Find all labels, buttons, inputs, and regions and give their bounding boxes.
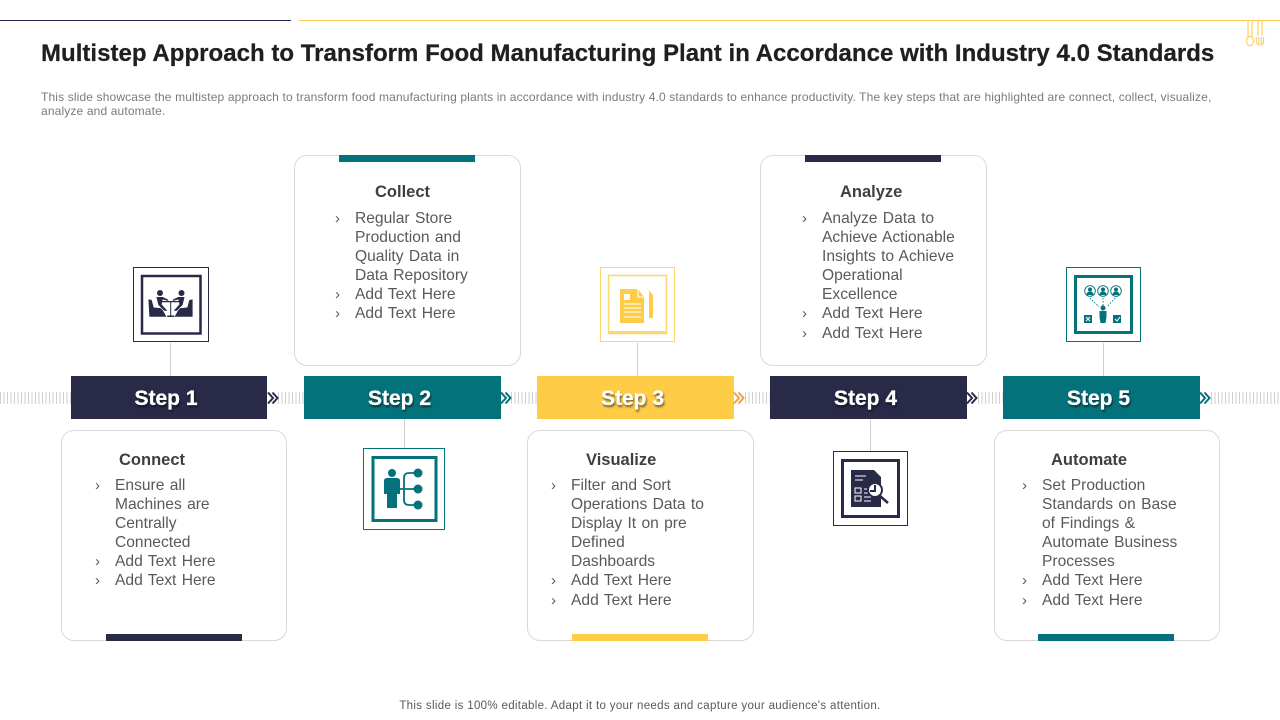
step 5 banner: Step 5 xyxy=(1067,387,1130,410)
arrow after step 5 xyxy=(1200,392,1211,404)
connect list: Ensure all Machines are Centrally Connected Add Text Here Add Text Here xyxy=(115,477,216,589)
panel: automate xyxy=(994,430,1220,641)
icon: spoon and fork xyxy=(1246,20,1264,46)
visualize heading: Visualize xyxy=(586,451,656,469)
automate list: Set Production Standards on Base of Findings & Automate Business Processes Add Text Here Add Text Here xyxy=(1042,477,1177,609)
panel: automate: › xyxy=(1022,572,1027,589)
panel: connect: › xyxy=(95,477,100,494)
visualize accent bar xyxy=(572,634,708,641)
panel: collect: › xyxy=(335,210,340,227)
panel: connect xyxy=(61,430,287,641)
collect list: Regular Store Production and Quality Data in Data Repository Add Text Here Add Text Here xyxy=(355,210,468,322)
automate heading: Automate xyxy=(1051,451,1127,469)
stripe band 2-3 xyxy=(511,392,537,404)
subtitle description: This slide showcase the multistep approach to transform food manufacturing plants in accordance with industry 4.0 standards to enhance productivity. The key steps that are highlighted are connect, collect, visualize, xyxy=(41,90,1211,104)
step 1 banner: Step 1 xyxy=(134,387,198,410)
panel: analyze: › xyxy=(802,325,807,342)
icon: documents xyxy=(600,267,675,342)
panel: analyze xyxy=(760,155,987,366)
top rule: dark segment xyxy=(0,20,291,21)
step 3 banner: Step 3 xyxy=(601,387,664,410)
connect heading: Connect xyxy=(119,451,185,469)
step 2 banner: Step 2 xyxy=(368,387,431,410)
icon: decision maker xyxy=(1066,267,1141,342)
collect accent bar xyxy=(339,155,475,162)
step 4 banner: Step 4 xyxy=(834,387,897,410)
icon: people meeting at table xyxy=(133,267,209,342)
analyze list: Analyze Data to Achieve Actionable Insights to Achieve Operational Excellence Add Text Here Add Text Here xyxy=(822,210,955,342)
connector step 3 xyxy=(637,343,638,376)
analyze accent bar xyxy=(805,155,941,162)
step 1 banner xyxy=(71,376,267,419)
stripe band left xyxy=(0,392,71,404)
arrow after step 4 xyxy=(967,392,978,404)
panel: automate: › xyxy=(1022,592,1027,609)
stripe band right xyxy=(1211,392,1280,404)
panel: analyze: › xyxy=(802,210,807,227)
stripe band 3-4 xyxy=(745,392,770,404)
panel: collect xyxy=(294,155,521,366)
step 3 banner xyxy=(537,376,734,419)
title: Multistep Approach to Transform Food Manufacturing Plant in Accordance with Industry 4.0 Standards xyxy=(41,40,1214,67)
analyze heading: Analyze xyxy=(840,183,902,201)
panel: connect: › xyxy=(95,553,100,570)
connect accent bar xyxy=(106,634,242,641)
connector step 4 xyxy=(870,419,871,451)
step 4 banner xyxy=(770,376,967,419)
panel: analyze: › xyxy=(802,305,807,322)
step 5 banner xyxy=(1003,376,1200,419)
subtitle description xyxy=(41,90,1211,118)
connector step 2 xyxy=(404,419,405,448)
visualize list: Filter and Sort Operations Data to Display It on pre Defined Dashboards Add Text Here Add Text Here xyxy=(571,477,704,609)
panel: automate: › xyxy=(1022,477,1027,494)
connector step 5 xyxy=(1103,343,1104,376)
panel: collect: › xyxy=(335,305,340,322)
connector step 1 xyxy=(170,343,171,376)
automate accent bar xyxy=(1038,634,1174,641)
panel: visualize: › xyxy=(551,592,556,609)
arrow after step 1 xyxy=(267,392,279,404)
subtitle description: analyze and automate. xyxy=(41,104,165,118)
top rule: yellow segment xyxy=(299,20,1280,21)
panel: visualize: › xyxy=(551,572,556,589)
step 2 banner xyxy=(304,376,501,419)
arrow after step 3 xyxy=(733,392,745,404)
stripe band 1-2 xyxy=(278,392,304,404)
icon: person with network xyxy=(363,448,445,530)
collect heading: Collect xyxy=(375,183,430,201)
icon: report with magnifier xyxy=(833,451,908,526)
panel: visualize xyxy=(527,430,754,641)
stripe band 4-5 xyxy=(978,392,1003,404)
panel: connect: › xyxy=(95,572,100,589)
panel: visualize: › xyxy=(551,477,556,494)
arrow after step 2 xyxy=(501,392,512,404)
footer note: This slide is 100% editable. Adapt it to your needs and capture your audience's attention. xyxy=(399,700,881,712)
panel: collect: › xyxy=(335,286,340,303)
